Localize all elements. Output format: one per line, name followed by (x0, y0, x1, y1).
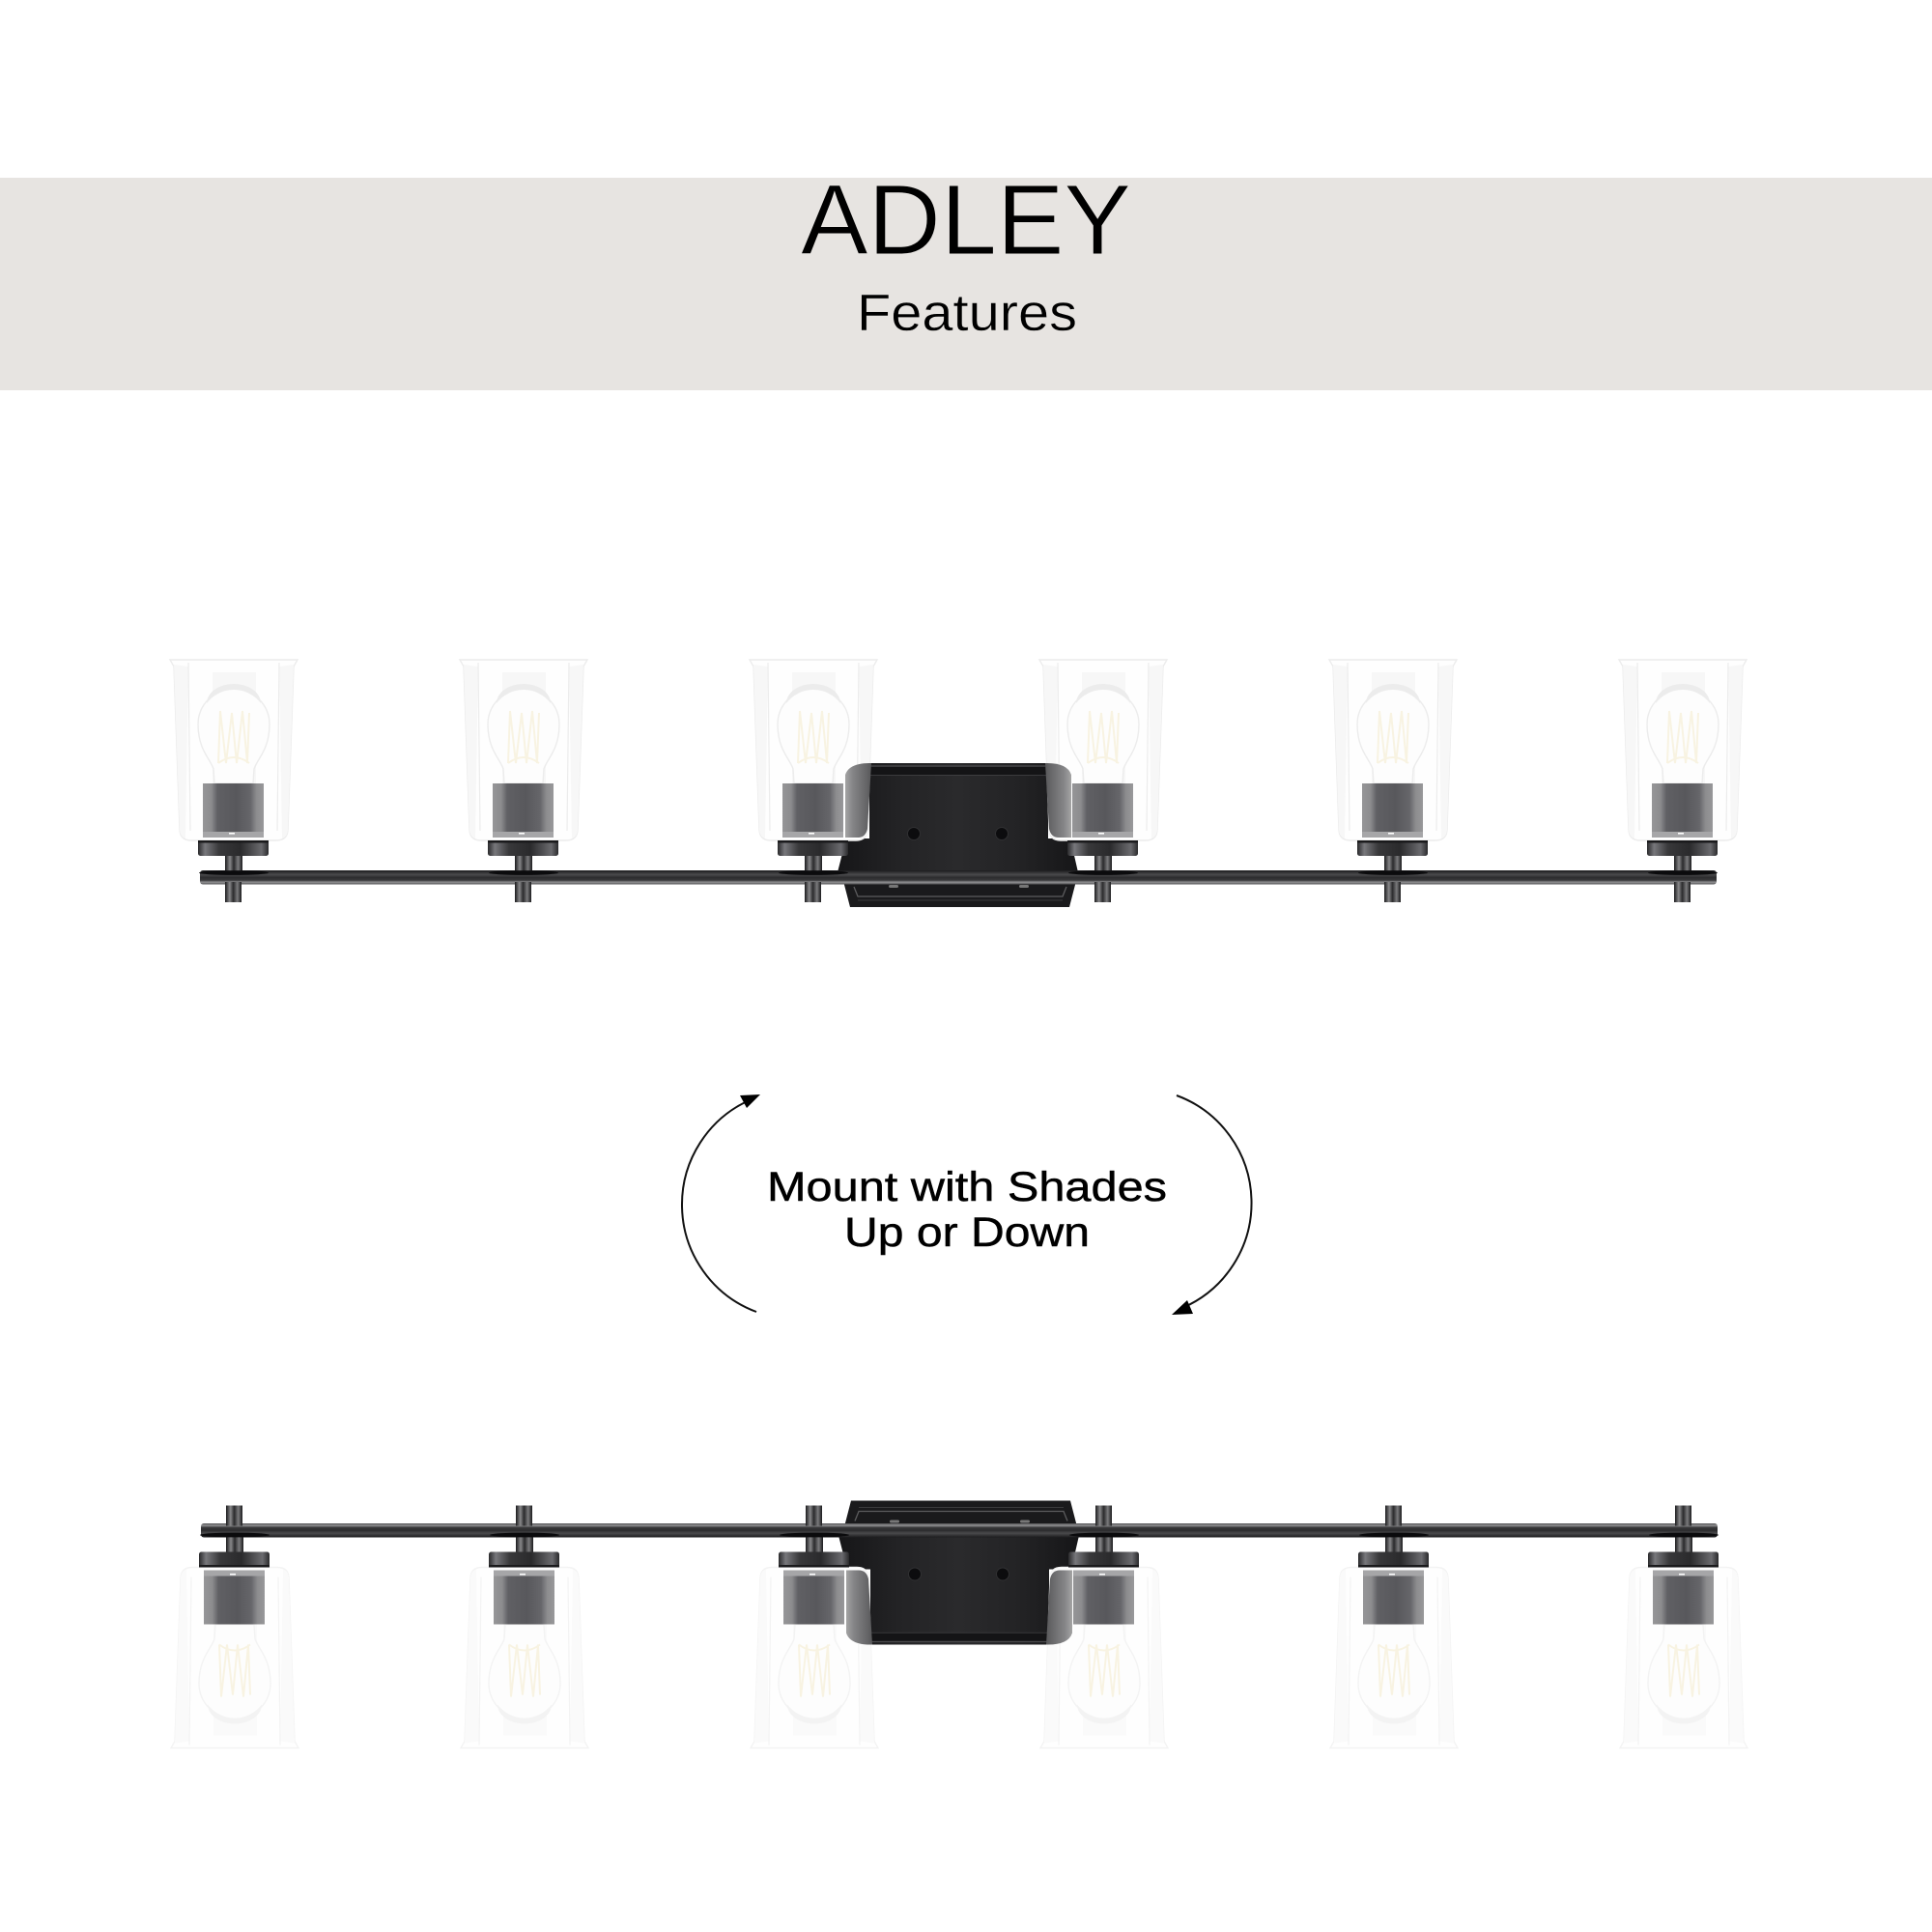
lamp 2 (460, 660, 587, 902)
callout text (767, 1164, 1167, 1256)
lamp 4 (1039, 660, 1167, 902)
upper light fixture: shades up (170, 660, 1747, 907)
subtitle: Features (857, 284, 1077, 342)
callout text: Up or Down (844, 1209, 1090, 1256)
lower light fixture: shades down (171, 1501, 1747, 1748)
lamp 1 (170, 660, 298, 902)
plate sides seen through glass (846, 1571, 1072, 1644)
lamp 2 (461, 1505, 588, 1748)
left curved arrow (682, 1094, 760, 1312)
horizontal rod (201, 1523, 1718, 1538)
lamp 6 (1619, 660, 1747, 902)
right curved arrow (1172, 1095, 1252, 1315)
mounting plate (838, 1501, 1079, 1644)
lamp 5 (1329, 660, 1457, 902)
lamp 6 (1620, 1505, 1747, 1748)
lamp 1 (171, 1505, 298, 1748)
header banner (0, 178, 1932, 390)
callout text: Mount with Shades (767, 1164, 1167, 1210)
plate sides seen through glass (845, 763, 1071, 838)
lamp 3 (751, 1505, 878, 1748)
title: ADLEY (801, 164, 1131, 275)
lamp 4 (1040, 1505, 1168, 1748)
mounting plate (838, 763, 1078, 907)
horizontal rod (200, 870, 1717, 885)
lamp 5 (1330, 1505, 1458, 1748)
lamp 3 (750, 660, 877, 902)
rotation callout (682, 1094, 1252, 1315)
